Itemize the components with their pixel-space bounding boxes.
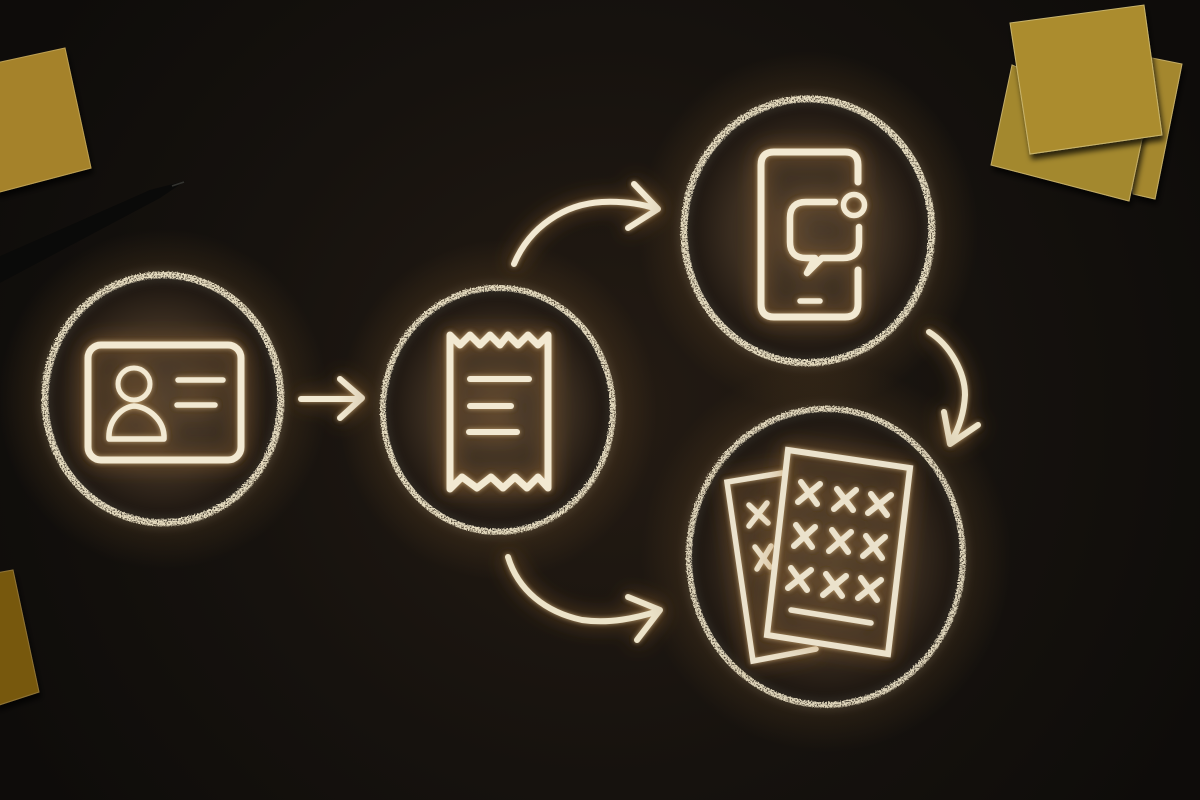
chalk circle xyxy=(45,275,281,523)
icon: rear ticket xyxy=(727,473,816,661)
icon: phone with message bubble xyxy=(761,152,864,317)
arrow: ID card to receipt xyxy=(301,379,362,418)
step 3: phone circle xyxy=(638,51,978,411)
step 1: ID card circle xyxy=(0,229,328,569)
arrow: phone to tickets xyxy=(929,332,978,444)
step 2: receipt circle xyxy=(338,240,658,580)
icon: receipt xyxy=(450,335,548,489)
halo and interior xyxy=(0,229,328,569)
pencil xyxy=(0,181,185,285)
halo and interior xyxy=(638,51,978,411)
sticky note: left top xyxy=(0,48,91,193)
chalk circle xyxy=(689,409,963,705)
step 4: tickets circle xyxy=(641,362,1011,752)
halo and interior xyxy=(641,362,1011,752)
arrow: receipt to phone xyxy=(514,184,658,264)
chalk circle xyxy=(383,288,613,532)
chalk circle xyxy=(684,99,932,363)
sticky note: left bottom xyxy=(0,570,39,706)
icon: front ticket xyxy=(767,450,910,654)
icon: ID card xyxy=(88,345,241,460)
sticky notes: top right stack xyxy=(991,5,1182,201)
halo and interior xyxy=(338,240,658,580)
arrow: receipt to tickets xyxy=(508,557,660,640)
